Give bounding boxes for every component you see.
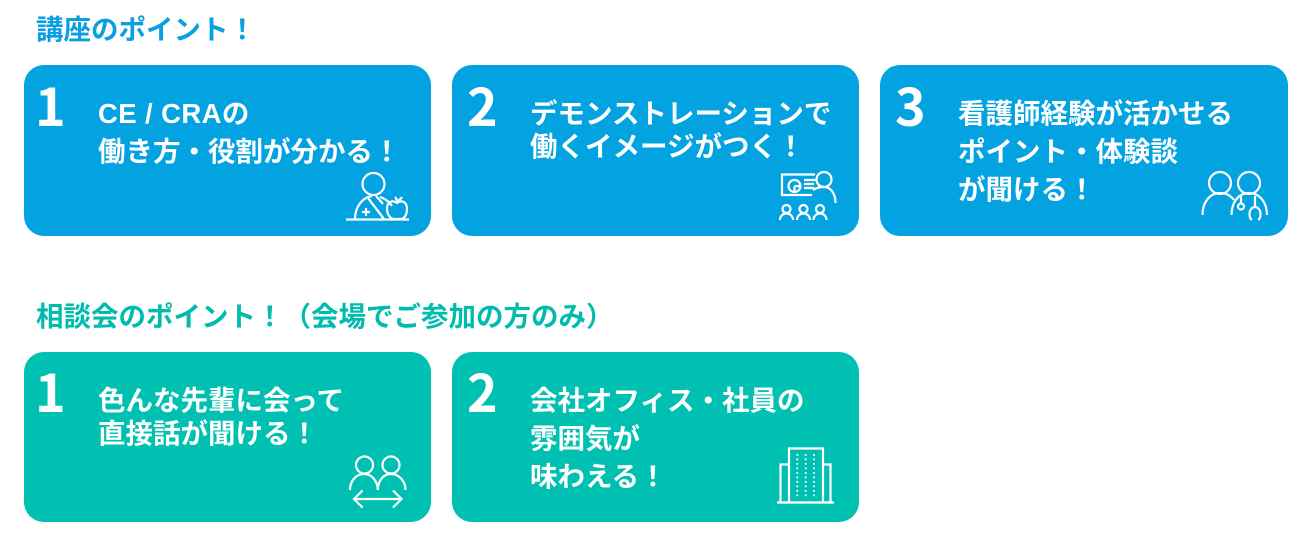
panel: course point 3 <box>880 65 1288 236</box>
card text: CE / CRAの <box>98 98 249 129</box>
card text: が聞ける！ <box>958 174 1096 205</box>
card text: 直接話が聞ける！ <box>98 418 318 449</box>
panel: consultation point 1 <box>24 352 431 522</box>
number 2: 2 <box>467 66 498 141</box>
card text: 味わえる！ <box>530 461 667 492</box>
panel: course point 1 <box>24 65 431 236</box>
card text: 働き方・役割が分かる！ <box>98 136 400 167</box>
card text: 色んな先輩に会って <box>98 385 344 416</box>
card text: 看護師経験が活かせる <box>958 98 1233 129</box>
heading: course points: 講座のポイント！ <box>36 14 256 45</box>
card text <box>98 98 400 167</box>
card text <box>530 385 804 492</box>
number 2: 2 <box>467 352 498 427</box>
card text: デモンストレーションで <box>530 98 831 129</box>
number 1: 1 <box>35 66 66 141</box>
card text <box>958 98 1233 205</box>
number 3: 3 <box>895 66 926 141</box>
card text <box>530 98 831 162</box>
card text: ポイント・体験談 <box>958 136 1178 167</box>
card text: 働くイメージがつく！ <box>530 131 804 162</box>
number 1: 1 <box>35 352 66 427</box>
panel: consultation point 2 <box>452 352 859 522</box>
card text: 会社オフィス・社員の <box>530 385 804 416</box>
card text <box>98 385 344 449</box>
panel: course point 2 <box>452 65 859 236</box>
heading: consultation points: 相談会のポイント！（会場でご参加の方のみ） <box>36 301 614 332</box>
card text: 雰囲気が <box>530 423 640 454</box>
